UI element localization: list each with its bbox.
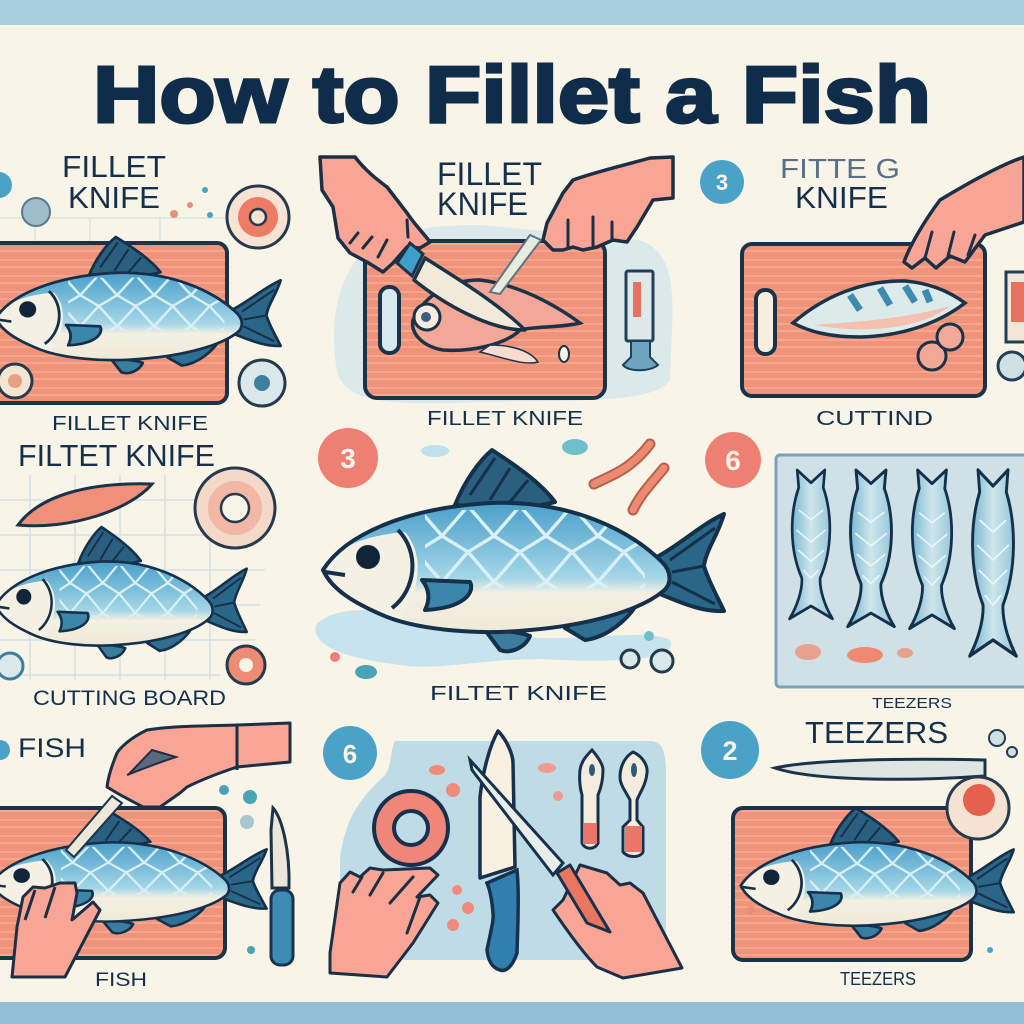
step badge: 2: [722, 736, 738, 766]
left hand: [320, 157, 430, 272]
caption: FILTET KNIFE: [430, 683, 607, 705]
cutting board: [0, 808, 225, 958]
fillet blade: [490, 235, 541, 294]
droplets: [219, 785, 229, 795]
fillet: [793, 281, 965, 337]
step badge: [701, 721, 759, 779]
side tool: [623, 271, 658, 370]
panel 4: cutting board diagram: [0, 438, 275, 710]
tray: [776, 455, 1024, 687]
heading: fillet knife: FILLET: [62, 149, 166, 184]
small scraps: [795, 644, 821, 660]
hand: [904, 157, 1024, 268]
water puddle: [316, 610, 671, 667]
rings: [227, 646, 265, 684]
caption: CUTTIND: [816, 408, 933, 430]
fish: [0, 527, 247, 658]
cutting board: [733, 808, 971, 960]
caption: FILLET KNIFE: [427, 408, 583, 430]
fillet knife diagonal: [470, 760, 610, 932]
caption: FISH: [95, 970, 147, 991]
cutting board: [365, 241, 605, 398]
salmon pieces: [594, 444, 664, 510]
fish: [0, 810, 267, 933]
small ring icon: [22, 198, 50, 226]
step badge: [318, 428, 378, 488]
grid: [0, 475, 265, 680]
specks: [989, 730, 1005, 746]
heading: FILLET: [437, 156, 542, 192]
step badge: [323, 726, 377, 780]
right hand: [543, 157, 673, 250]
lower hand: [12, 883, 100, 977]
panel 3: filleted fish on board: [700, 153, 1024, 430]
heading: FILTET KNIFE: [18, 438, 215, 473]
droplets: [562, 439, 588, 455]
small fish row: [790, 470, 1016, 656]
panel 6: four fillets: [705, 432, 1024, 712]
roe circles: [918, 342, 946, 370]
panel 3: filleted fish on board: KNIFE: [795, 180, 888, 215]
long knife: [775, 759, 985, 779]
step badge: [700, 160, 744, 204]
red dots: [429, 765, 445, 775]
panel 1: fish on cutting board: KNIFE: [68, 180, 160, 215]
left hand: [330, 868, 438, 977]
cutting board: [0, 243, 227, 403]
large fish: [323, 450, 724, 651]
fish: [0, 237, 281, 373]
caption: CUTTING BOARD: [33, 687, 226, 710]
panel 5: large fish: [316, 428, 724, 705]
fish: [741, 808, 1014, 938]
caption: TEEZERS: [840, 969, 916, 989]
step badge: 6: [725, 445, 741, 476]
heading: TEEZERS: [805, 715, 948, 750]
panel 9: fish and tweezers: [701, 715, 1017, 989]
right tool: [1006, 272, 1024, 342]
side knife: [271, 808, 293, 965]
panel 2: hands cutting fish: [320, 156, 673, 430]
blue backdrop: [340, 741, 666, 960]
cutting board: [742, 244, 985, 396]
chef knife: [397, 243, 525, 330]
chef knife: [480, 731, 518, 970]
step badge: 3: [340, 443, 356, 474]
step badge: [705, 432, 761, 488]
panel 8: knives and tools: [323, 726, 682, 978]
step badge: 6: [343, 739, 357, 769]
upper hand: [107, 723, 290, 807]
step badge: [0, 740, 10, 760]
title: How to Fillet a Fish: [93, 50, 931, 139]
step badge 1: [0, 172, 12, 198]
heading: FITTE G: [780, 153, 900, 184]
disc: [947, 777, 1009, 839]
target disc: [227, 186, 289, 248]
pale blue backdrop: [334, 225, 673, 403]
small tools: [580, 750, 647, 856]
ring: [374, 791, 448, 865]
knife in hand: [66, 796, 122, 857]
panel 7: holding fish: [0, 723, 293, 991]
disc: [195, 468, 275, 548]
cut fish: [413, 280, 580, 363]
step badge: 3: [716, 170, 728, 195]
caption: TEEZERS: [872, 695, 952, 712]
caption: FILLET KNIFE: [52, 413, 208, 435]
panel 2: hands cutting fish: KNIFE: [437, 186, 528, 222]
salmon fillet: [18, 484, 152, 526]
small rings: [0, 364, 32, 398]
panel 1: fish on cutting board: [0, 149, 289, 435]
right hand: [553, 865, 682, 978]
heading: FISH: [18, 733, 86, 763]
